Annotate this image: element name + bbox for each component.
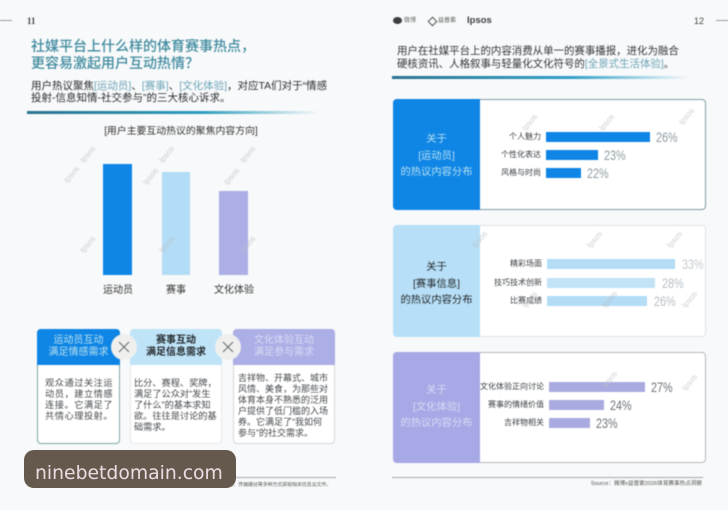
card body [134,378,217,432]
row: highlights [510,257,704,272]
row: mascot [504,416,618,431]
watermarks: Ipsos [222,166,241,187]
right page number: 12 [694,16,704,26]
card body [44,378,113,421]
watermarks: Ipsos [78,144,97,165]
bar: events [162,172,190,275]
bar: athletes [103,164,132,275]
watermarks: Ipsos [677,106,696,127]
row: results: 26% [654,294,676,309]
row: expression [500,148,626,163]
icon: multiply 1 [111,334,137,360]
card body: 风情、美食，为那些对 [238,384,328,394]
watermarks: Ipsos [470,229,489,250]
watermarks: Ipsos [141,166,160,187]
card header: 满足参与需求 [254,347,314,358]
row: charm: 26% [656,130,678,145]
row: expression: 23% [604,148,626,163]
title [30,38,255,71]
watermark banner: ninebetdomain.com [35,463,223,484]
watermarks: Ipsos [600,289,619,310]
intro text [30,80,328,104]
card body: 共情心理投射。 [45,411,113,421]
chart title: [用户主要互动热议的聚焦内容方向] [104,126,258,137]
label: events: 赛事 [166,285,186,296]
row: technique: 技巧技术创新 [494,278,542,287]
row: technique [494,276,684,291]
panel side heading: 关于 [426,134,447,145]
right header rule [392,76,690,79]
bar chart: hot topics [102,163,254,296]
watermarks: Ipsos [157,234,176,255]
panel side heading: 关于 [426,262,447,273]
card: athlete interaction [37,329,120,444]
row: discussion: 文化体验正向讨论 [480,382,544,391]
card body: 础需求。 [134,422,171,432]
row: mascot: 吉祥物相关 [504,418,544,427]
row: style: 22% [587,166,609,181]
panel side heading: [运动员] [418,151,455,162]
watermarks: Ipsos [585,229,604,250]
title: 更容易激起用户互动热情？ [31,55,199,71]
card body: 参与”的社交需求。 [238,428,313,438]
watermarks: Ipsos [238,144,257,165]
right footer rule and source: Source：微博x益普索2026体育赛事热点洞察 [591,481,702,487]
title: 社媒平台上什么样的体育赛事热点， [31,38,255,54]
logo: weibo: 微博 [404,18,416,24]
panel side heading: [文化体验] [413,402,460,413]
row: discussion [480,380,673,395]
panel: culture [393,352,706,463]
card body: 连接。它满足了 [45,400,113,410]
row: emotion: 赛事的情绪价值 [488,400,544,409]
row: charm [508,130,678,145]
card header: 满足信息需求 [146,347,206,358]
card header [37,329,120,365]
panel side heading: 的热议内容分布 [400,418,473,429]
card body: 动员，建立情感 [45,389,113,399]
label: culture: 文化体验 [214,285,254,296]
row: results [510,294,676,309]
card body: 券。它满足了“我如何 [238,417,322,427]
panel side heading: 的热议内容分布 [400,167,473,178]
card body: 观众通过关注运 [45,378,113,388]
watermarks: Ipsos [78,234,97,255]
logo: partner [427,16,456,27]
row: mascot: 23% [596,416,618,431]
card header [130,329,222,365]
card body: 吉祥物、开幕式、城市 [238,373,328,383]
panel side heading [393,352,480,463]
watermarks: Ipsos [680,289,699,310]
card body: 满足了公众对“发生 [134,389,211,399]
row: charm: 个人魅力 [509,132,541,141]
watermarks: Ipsos [600,369,619,390]
watermarks: Ipsos [665,229,684,250]
watermarks: Ipsos [62,164,81,185]
card header: 赛事互动 [156,335,196,346]
card body: 体育本身不熟悉的泛用 [238,395,328,405]
right intro text [396,44,679,70]
row: technique: 28% [662,276,684,291]
card body: 欲。往往是讨论的基 [134,411,217,421]
card body: 比分、赛程、奖牌， [134,378,217,388]
row: emotion [488,398,632,413]
watermarks: Ipsos [680,372,699,393]
row: emotion: 24% [610,398,632,413]
left page number: 11 [27,16,36,26]
row: style [500,166,609,181]
card body: 了什么”的基本求知 [134,400,211,410]
left header rule [27,111,319,114]
left footer rule and footnote: 数据来源：微博社媒平台公开内容，微博平台用户数据统计；内容热议量包括转发、评论、点赞、传播路径等多种方式获取相关信息及文件。 [28,483,331,488]
icon: multiply 2 [215,334,241,360]
watermark banner [24,450,236,488]
panel side heading: 关于 [426,385,447,396]
logo: weibo [392,16,416,25]
row: expression: 个性化表达 [501,150,541,159]
logos [392,15,492,27]
watermarks: Ipsos [597,112,616,133]
row: discussion: 27% [651,380,673,395]
row: style: 风格与时尚 [501,168,541,177]
card header [233,329,335,365]
card body [238,372,328,438]
row: results: 比赛成绩 [510,296,542,305]
panel side heading: [赛事信息] [413,279,460,290]
card: culture interaction [233,329,335,444]
panel: athletes [393,99,706,210]
panel side heading [393,99,480,210]
intro text: 投射-信息知情-社交参与”的三大核心诉求。 [31,92,230,104]
watermarks: Ipsos [157,144,176,165]
card header: 满足情感需求 [48,347,108,358]
watermarks: Ipsos [520,112,539,133]
label: athletes: 运动员 [103,285,133,296]
card body: 户提供了低门槛的入场 [238,406,328,416]
row: highlights: 精彩场面 [510,259,542,268]
right intro text: 硬核资讯、人格叙事与轻量化文化符号的[全景式生活体验]。 [397,59,674,70]
card header: 文化体验互动 [254,335,314,346]
intro text: 用户热议聚焦[运动员]、[赛事]、[文化体验]，对应TA们对于“情感 [31,80,327,92]
logo: ipsos: Ipsos [467,15,492,26]
right intro text: 用户在社媒平台上的内容消费从单一的赛事播报，进化为融合 [397,46,679,57]
bar: culture [219,191,248,275]
row: highlights: 33% [682,257,704,272]
logo: partner: 益普索 [438,18,456,24]
panel: event info [393,225,706,337]
watermarks: Ipsos [520,289,539,310]
card: event interaction [130,329,222,444]
panel side heading: 的热议内容分布 [400,295,473,306]
card header: 运动员互动 [54,335,104,346]
panel side heading [393,225,480,337]
watermarks: Ipsos [238,234,257,255]
